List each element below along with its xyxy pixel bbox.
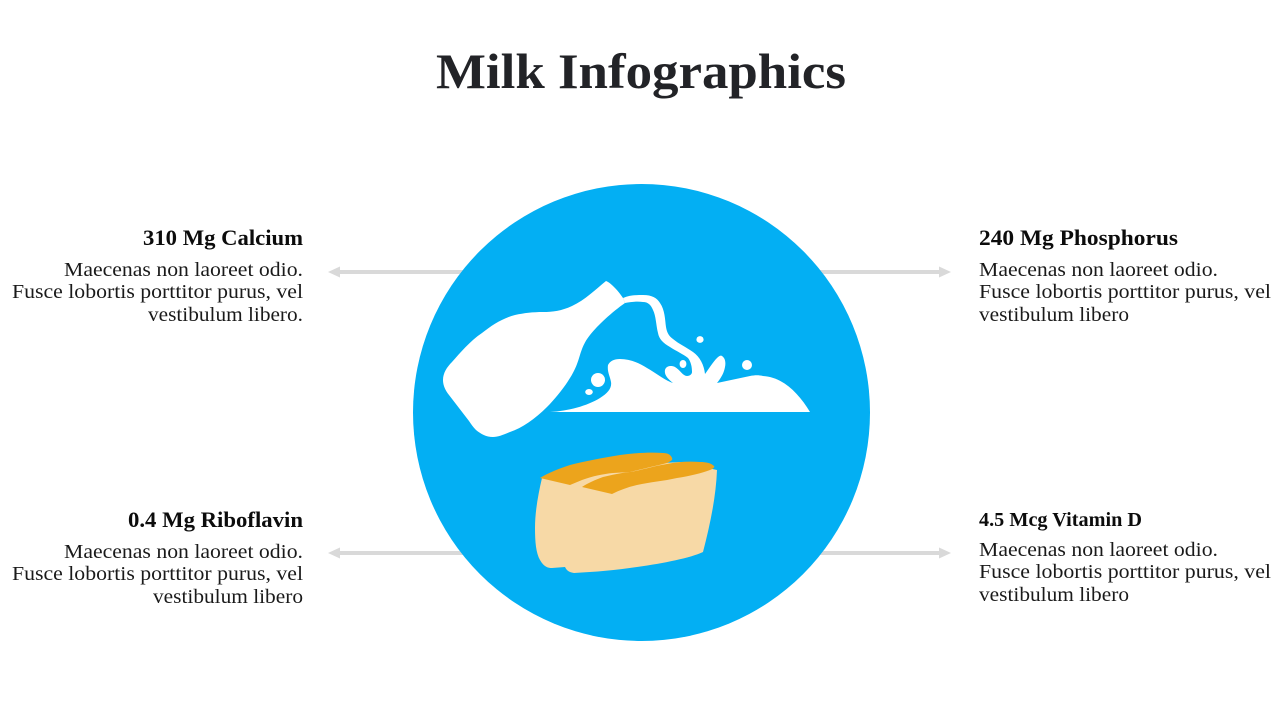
text block: phosphorus: Maecenas non laoreet odio.	[979, 259, 1218, 281]
text block: phosphorus: 240 Mg Phosphorus	[979, 225, 1178, 250]
text block: vitamin D: 4.5 Mcg Vitamin D	[979, 509, 1142, 531]
text block: riboflavin	[12, 507, 303, 608]
text block: calcium: Maecenas non laoreet odio.	[64, 259, 303, 281]
arrow: top right	[805, 266, 951, 278]
arrow: bottom right	[805, 548, 951, 558]
text block: calcium: vestibulum libero.	[148, 304, 303, 326]
icon: milk bottle pouring into splash	[443, 281, 810, 437]
title: Milk Infographics	[436, 43, 846, 99]
text block: vitamin D: vestibulum libero	[979, 584, 1129, 606]
text block: riboflavin: 0.4 Mg Riboflavin	[128, 507, 303, 532]
text block: riboflavin: Maecenas non laoreet odio.	[64, 541, 303, 563]
text block: vitamin D: Maecenas non laoreet odio.	[979, 539, 1218, 561]
text block: calcium	[12, 225, 303, 326]
text block: vitamin D: Fusce lobortis porttitor purus, vel	[979, 561, 1271, 583]
central circle	[413, 184, 870, 641]
text block: calcium: Fusce lobortis porttitor purus, vel	[12, 281, 303, 303]
text block: riboflavin: vestibulum libero	[153, 586, 303, 608]
text block: vitamin D	[979, 509, 1271, 606]
arrow: top left	[328, 266, 478, 278]
text block: riboflavin: Fusce lobortis porttitor purus, vel	[12, 563, 303, 585]
icon: bread slice with butter	[535, 453, 717, 573]
arrow: bottom left	[328, 548, 478, 558]
text block: calcium: 310 Mg Calcium	[143, 225, 303, 250]
text block: phosphorus: vestibulum libero	[979, 304, 1129, 326]
text block: phosphorus	[979, 225, 1271, 326]
text block: phosphorus: Fusce lobortis porttitor purus, vel	[979, 281, 1271, 303]
